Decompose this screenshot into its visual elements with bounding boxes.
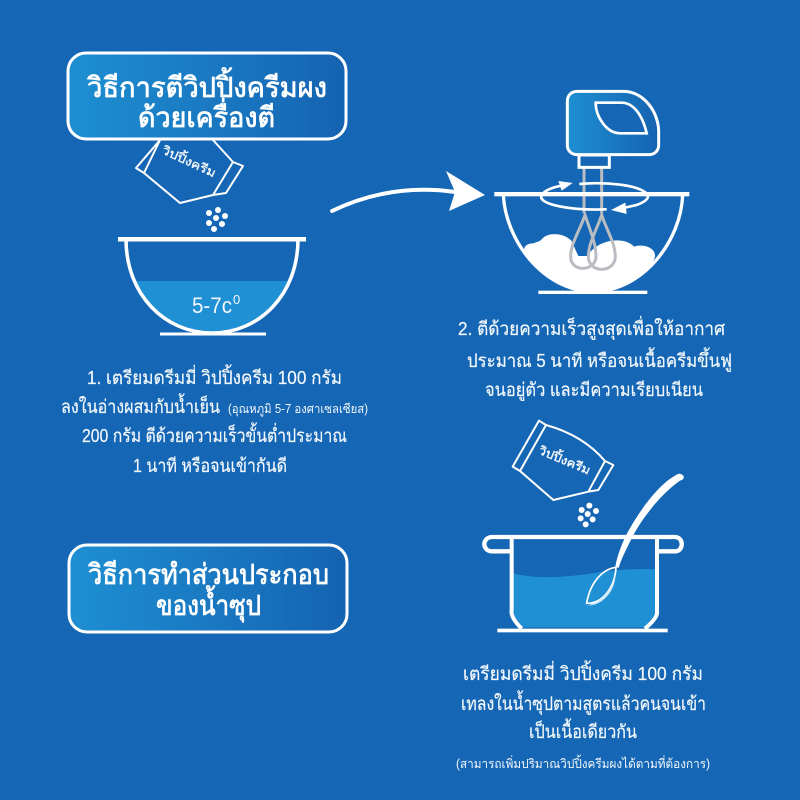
infographic canvas xyxy=(62,52,731,770)
step 2 text: ประมาณ 5 นาที หรือจนเนื้อครีมขึ้นฟู xyxy=(467,347,732,372)
step 1 text: 1. เตรียมดรีมมี่ วิปปิ้งครีม 100 กรัม xyxy=(87,364,342,388)
step 2 text: จนอยู่ตัว และมีความเรียบเนียน xyxy=(485,379,703,401)
soup step text xyxy=(456,660,710,771)
soup step text: (สามารถเพิ่มปริมาณวิปปิ้งครีมผงได้ตามที่ต้องการ) xyxy=(456,754,710,771)
icon: mixing bowl with cold water: 5-7c xyxy=(192,293,232,318)
soup step text: เตรียมดรีมมี่ วิปปิ้งครีม 100 กรัม xyxy=(463,660,703,684)
icon: mixing bowl with cold water xyxy=(118,237,306,336)
mixer body xyxy=(579,155,609,167)
spoon xyxy=(615,474,684,568)
step 1 text: 1 นาที หรือจนเข้ากันดี xyxy=(133,455,287,476)
heading: soup ingredient method: ของน้ำซุป xyxy=(156,585,261,623)
step 1 text xyxy=(61,364,368,476)
step 1 text: ลงในอ่างผสมกับน้ำเย็น xyxy=(61,393,220,417)
bowl xyxy=(503,194,683,291)
mixer beaters xyxy=(571,167,615,269)
soup step text: เป็นเนื้อเดียวกัน xyxy=(529,718,637,742)
step 2 text: 2. ตีด้วยความเร็วสูงสุดเพื่อให้อากาศ xyxy=(458,316,725,341)
arrow xyxy=(332,171,485,211)
icon: hand mixer in bowl xyxy=(494,91,689,294)
packet label: วิปปิ้งครีม xyxy=(536,441,593,478)
soup xyxy=(513,569,656,627)
heading: whipping method xyxy=(68,53,346,139)
icon: powder packet pouring xyxy=(136,140,243,203)
heading: whipping method: ด้วยเครื่องตี xyxy=(138,98,275,133)
icon: powder packet and pot with spoon xyxy=(484,421,684,632)
step 1 text: (อุณหภูมิ 5-7 องศาเซลเซียส) xyxy=(228,402,368,417)
icon: powder dots xyxy=(206,207,228,232)
rotation arrows xyxy=(541,183,648,210)
step 1 text: 200 กรัม ตีด้วยความเร็วขั้นต่ำประมาณ xyxy=(82,422,347,446)
heading: soup ingredient method xyxy=(69,545,347,632)
heading: whipping method: วิธีการตีวิปปิ้งครีมผง xyxy=(87,67,327,103)
heading: soup ingredient method: วิธีการทำส่วนประกอบ xyxy=(88,559,329,590)
icon: powder packet pouring: วิปปิ้งครีม xyxy=(159,141,219,180)
soup step text: เทลงในน้ำซุปตามสูตรแล้วคนจนเข้า xyxy=(461,690,706,716)
icon: mixing bowl with cold water: 0 xyxy=(233,292,240,307)
packet outline xyxy=(513,421,613,500)
step 2 text xyxy=(458,316,732,401)
powder dots xyxy=(578,503,599,527)
whipped cream xyxy=(524,234,655,291)
pot xyxy=(511,537,657,629)
